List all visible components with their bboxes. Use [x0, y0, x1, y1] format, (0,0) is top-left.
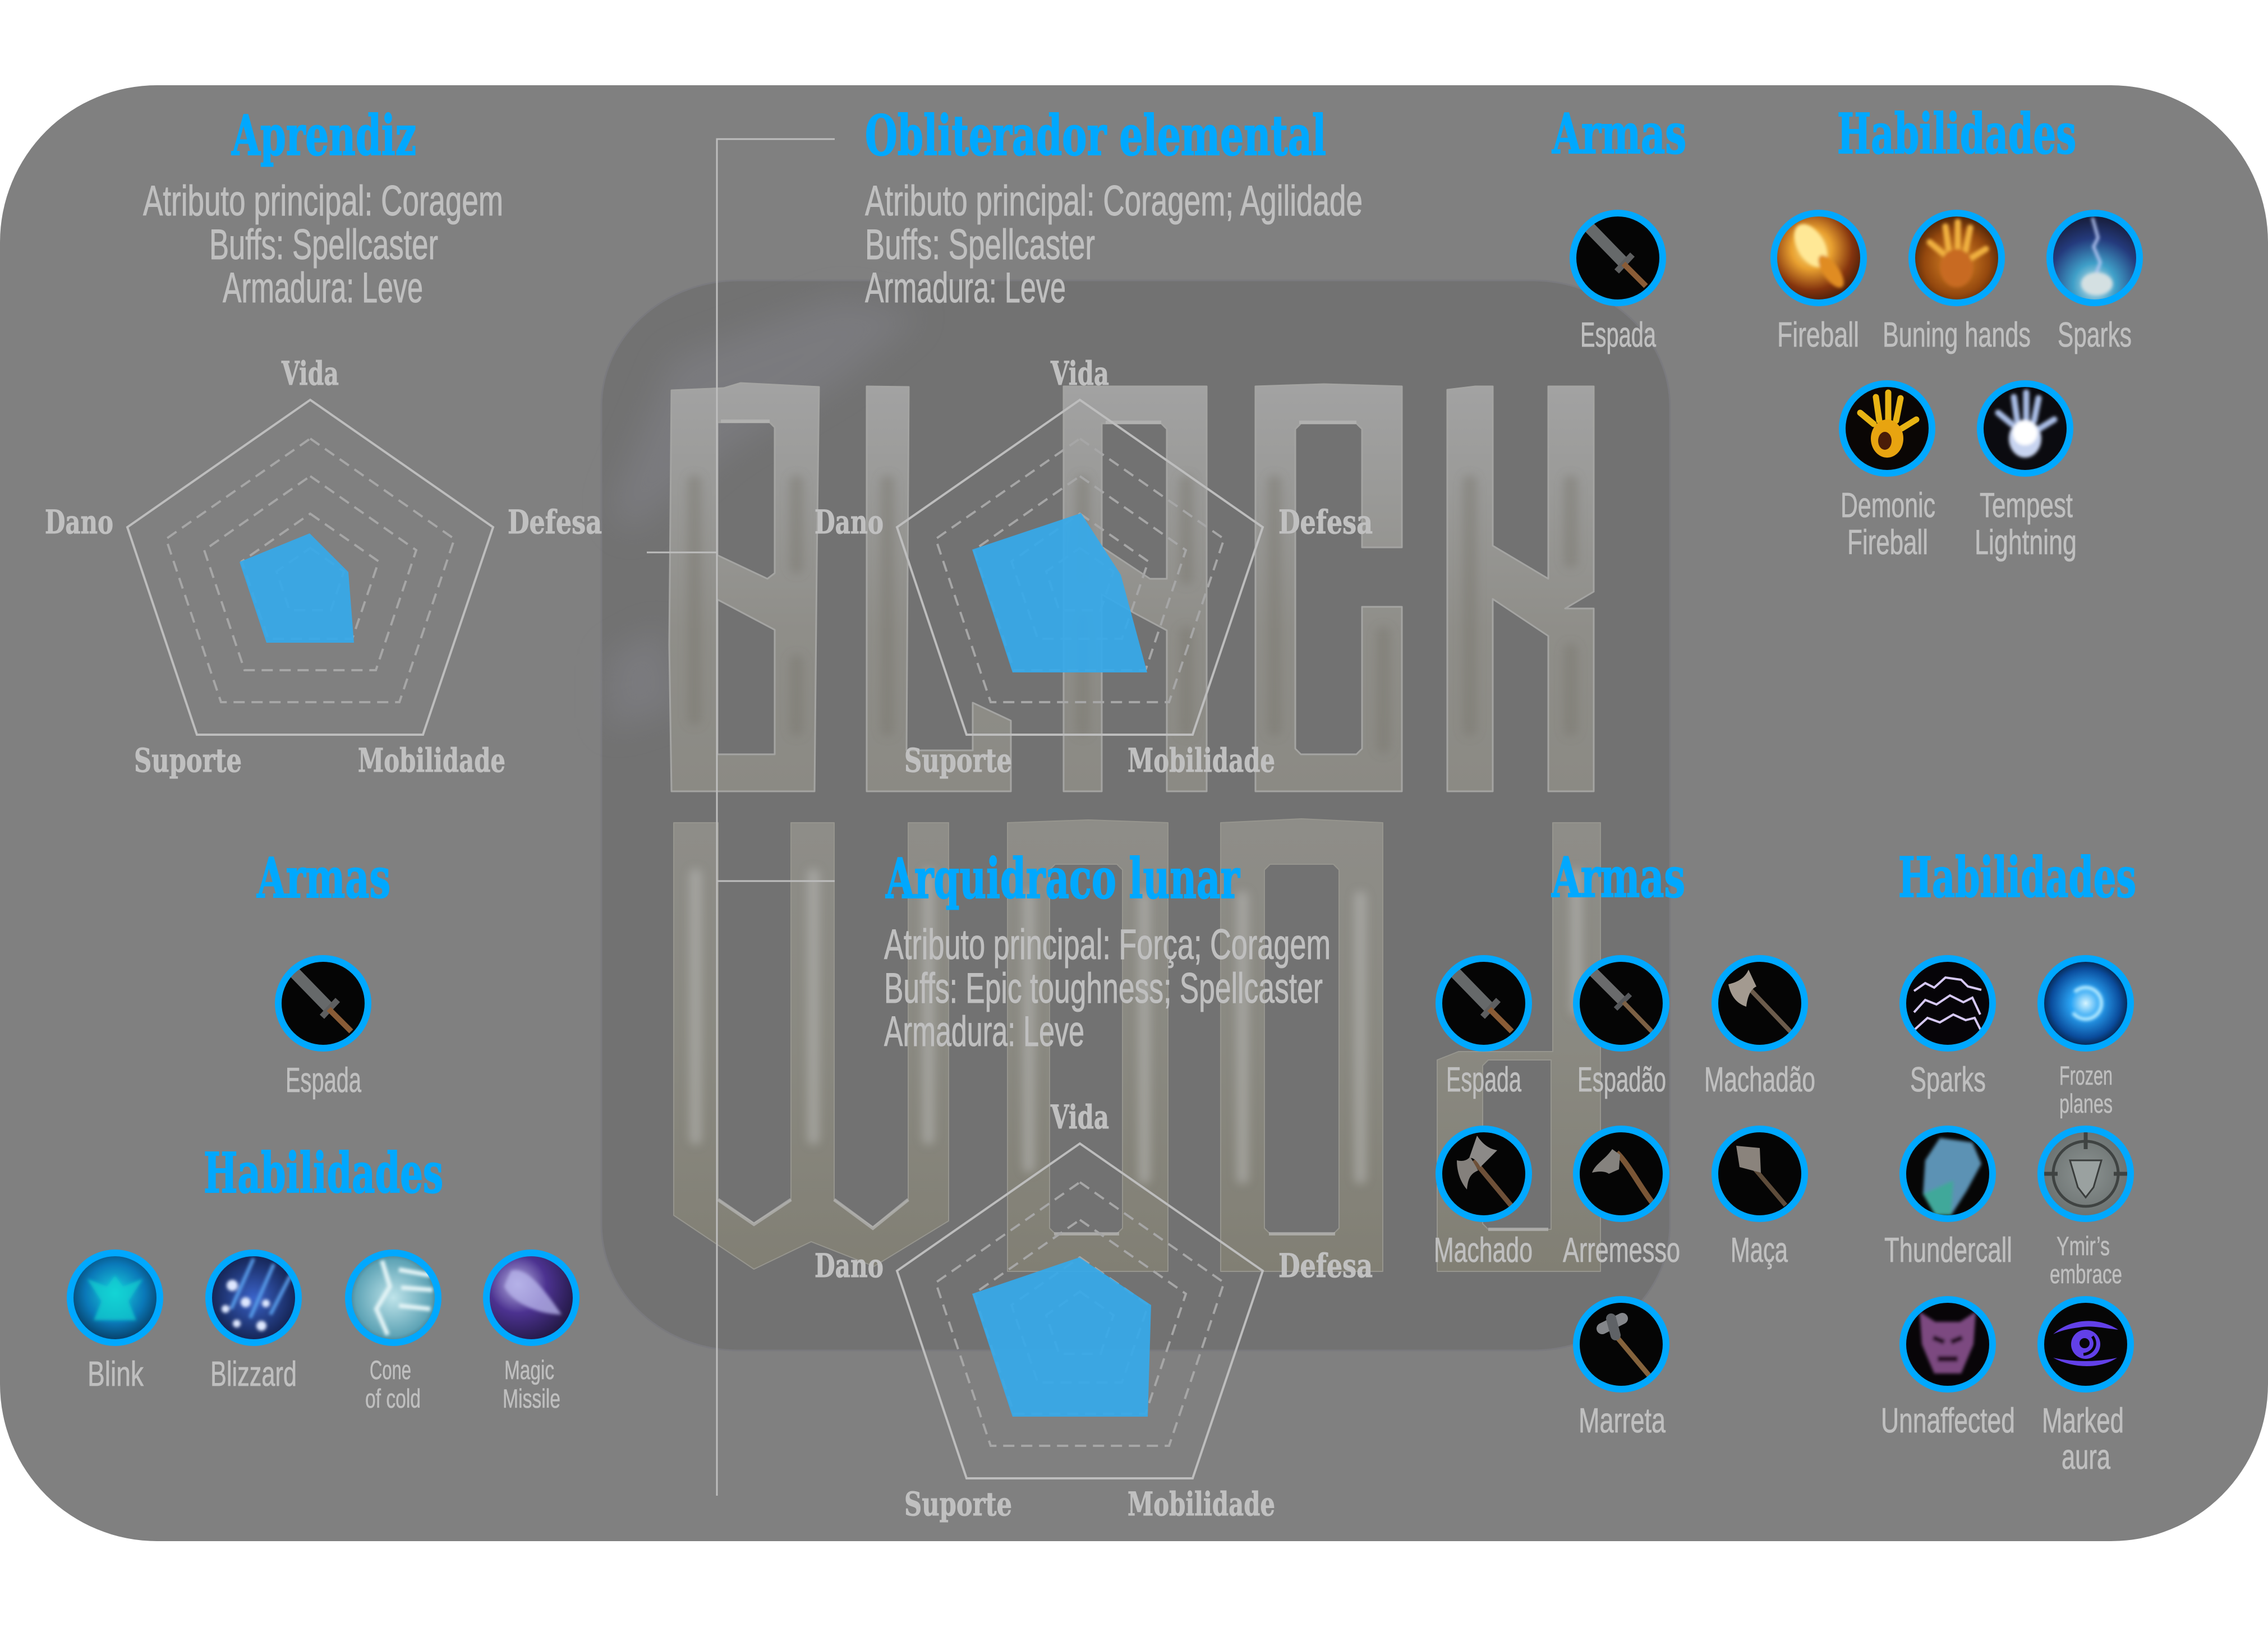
radar chart: Obliterador: Dano — [815, 503, 884, 541]
stats text: Arquidraco: Buffs: Epic toughness; Spellcaster — [884, 965, 1323, 1012]
skill: Fireball: Fireball — [1777, 316, 1859, 354]
skill: Frozen planes: planes — [2059, 1089, 2113, 1118]
heading: Aprendiz: Aprendiz — [231, 104, 416, 168]
stats text: Aprendiz: Armadura: Leve — [223, 264, 423, 312]
skill: Buning hands — [1883, 213, 2031, 354]
skill: Blizzard — [209, 1253, 298, 1394]
skill: Thundercall — [1884, 1129, 2012, 1270]
skill: Frozen planes: Frozen — [2059, 1061, 2113, 1090]
skill: Marked aura: aura — [2062, 1438, 2110, 1477]
skill: Demonic Fireball: Fireball — [1847, 523, 1928, 562]
skill: Magic Missile: Magic — [504, 1355, 554, 1385]
skill: Sparks — [2050, 213, 2140, 354]
radar chart: Arquidraco: Suporte — [904, 1485, 1012, 1523]
radar chart: Arquidraco: Dano — [815, 1247, 884, 1285]
skill: Demonic Fireball — [1841, 384, 1935, 562]
skill: Demonic Fireball: Demonic — [1841, 486, 1935, 525]
stats text: Aprendiz: Atributo principal: Coragem — [143, 177, 503, 225]
radar chart: Aprendiz: Vida — [281, 354, 339, 393]
radar chart: Aprendiz: Suporte — [134, 741, 242, 780]
radar chart: Obliterador: Defesa — [1278, 503, 1373, 541]
radar chart: Aprendiz: Defesa — [508, 503, 602, 541]
skill: Sparks: Sparks — [2058, 316, 2132, 354]
skill: Marked aura: Marked — [2042, 1402, 2124, 1440]
radar chart: Obliterador — [815, 354, 1373, 780]
weapon: Espada: Espada — [1446, 1061, 1521, 1099]
weapon: Espada: Espada — [286, 1061, 361, 1100]
heading: Habilidades: Habilidades — [1837, 102, 2076, 167]
weapon: Espadão: Espadão — [1577, 1061, 1666, 1099]
weapon: Arremesso: Arremesso — [1563, 1231, 1680, 1270]
skill: Marked aura — [2041, 1299, 2131, 1477]
weapon: Machado: Machado — [1434, 1231, 1533, 1270]
skill: Magic Missile: Missile — [503, 1384, 560, 1413]
radar chart: Aprendiz: Mobilidade — [358, 741, 505, 780]
heading: Armas: Armas — [1551, 846, 1685, 910]
heading: Habilidades: Habilidades — [1898, 846, 2136, 910]
weapon: Arremesso — [1563, 1129, 1680, 1270]
weapon: Marreta: Marreta — [1579, 1402, 1666, 1440]
weapon: Espada — [278, 958, 368, 1100]
weapon: Machadão: Machadão — [1704, 1061, 1815, 1099]
skill: Blink — [70, 1253, 160, 1394]
heading: Armas: Armas — [1552, 102, 1686, 167]
weapon: Marreta — [1576, 1299, 1666, 1440]
radar chart: Obliterador: Suporte — [904, 741, 1012, 780]
skill: Ymir's embrace — [2041, 1129, 2131, 1289]
skill: Ymir's embrace: embrace — [2050, 1259, 2122, 1289]
skill: Unnaffected: Unnaffected — [1881, 1402, 2015, 1440]
stats text: Arquidraco: Atributo principal: Força; Coragem — [884, 921, 1331, 969]
connector lines — [647, 139, 835, 1496]
skill: Tempest Lightning — [1975, 384, 2077, 562]
stats text: Obliterador: Atributo principal: Coragem; Agilidade — [865, 177, 1363, 225]
skill: Ymir's embrace: Ymir’s — [2057, 1231, 2110, 1261]
radar chart: Aprendiz: Dano — [45, 503, 113, 541]
skill: Magic Missile — [486, 1253, 576, 1413]
skill: Cone of cold — [348, 1253, 438, 1413]
class panel: Aprendiz — [45, 104, 602, 1413]
stats text: Arquidraco — [884, 921, 1331, 1055]
stats text: Obliterador: Buffs: Spellcaster — [865, 221, 1095, 269]
weapon: Espada: Espada — [1580, 316, 1656, 354]
weapon: Machadão — [1704, 958, 1815, 1099]
weapon: Espada — [1573, 213, 1663, 354]
radar chart: Obliterador: Vida — [1050, 354, 1109, 393]
radar chart: Arquidraco: Vida — [1050, 1098, 1109, 1136]
heading: Obliterador elemental: Obliterador elemental — [865, 104, 1326, 168]
skill: Buning hands: Buning hands — [1883, 316, 2031, 354]
skill: Frozen planes — [2041, 958, 2131, 1118]
skill: Fireball — [1774, 213, 1864, 354]
skill: Cone of cold: of cold — [365, 1384, 421, 1413]
stats text: Arquidraco: Armadura: Leve — [884, 1008, 1084, 1055]
radar chart: Arquidraco — [815, 1098, 1373, 1523]
skill: Cone of cold: Cone — [370, 1355, 411, 1385]
radar chart: Obliterador: Mobilidade — [1128, 741, 1275, 780]
stats text: Obliterador: Armadura: Leve — [865, 264, 1066, 312]
skill: Sparks: Sparks — [1910, 1061, 1986, 1099]
weapon: Espada — [1439, 958, 1529, 1099]
weapon: Machado — [1434, 1129, 1533, 1270]
skill: Thundercall: Thundercall — [1884, 1231, 2012, 1270]
stats text: Obliterador — [865, 177, 1363, 312]
radar chart: Arquidraco: Defesa — [1278, 1247, 1373, 1285]
heading: Arquidraco lunar: Arquidraco lunar — [885, 847, 1240, 911]
radar chart: Arquidraco: Mobilidade — [1128, 1485, 1275, 1523]
skill: Sparks — [1903, 958, 1993, 1099]
class panel: Arquidraco lunar — [815, 846, 2136, 1523]
skill: Tempest Lightning: Lightning — [1975, 523, 2077, 562]
weapon: Maça: Maça — [1731, 1231, 1788, 1270]
skill: Tempest Lightning: Tempest — [1980, 486, 2073, 525]
skill: Blizzard: Blizzard — [210, 1355, 297, 1394]
skill: Blink: Blink — [88, 1355, 144, 1394]
logo: Black Wood background — [601, 280, 1670, 1350]
class panel: Obliterador elemental — [815, 102, 2140, 780]
weapon: Maça — [1715, 1129, 1805, 1270]
heading: Armas: Armas — [256, 846, 390, 911]
skill: Unnaffected — [1881, 1299, 2015, 1440]
stats text: Aprendiz — [143, 177, 503, 312]
heading: Habilidades: Habilidades — [204, 1141, 443, 1206]
weapon: Espadão — [1576, 958, 1666, 1099]
stats text: Aprendiz: Buffs: Spellcaster — [209, 221, 438, 269]
radar chart: Aprendiz — [45, 354, 602, 780]
